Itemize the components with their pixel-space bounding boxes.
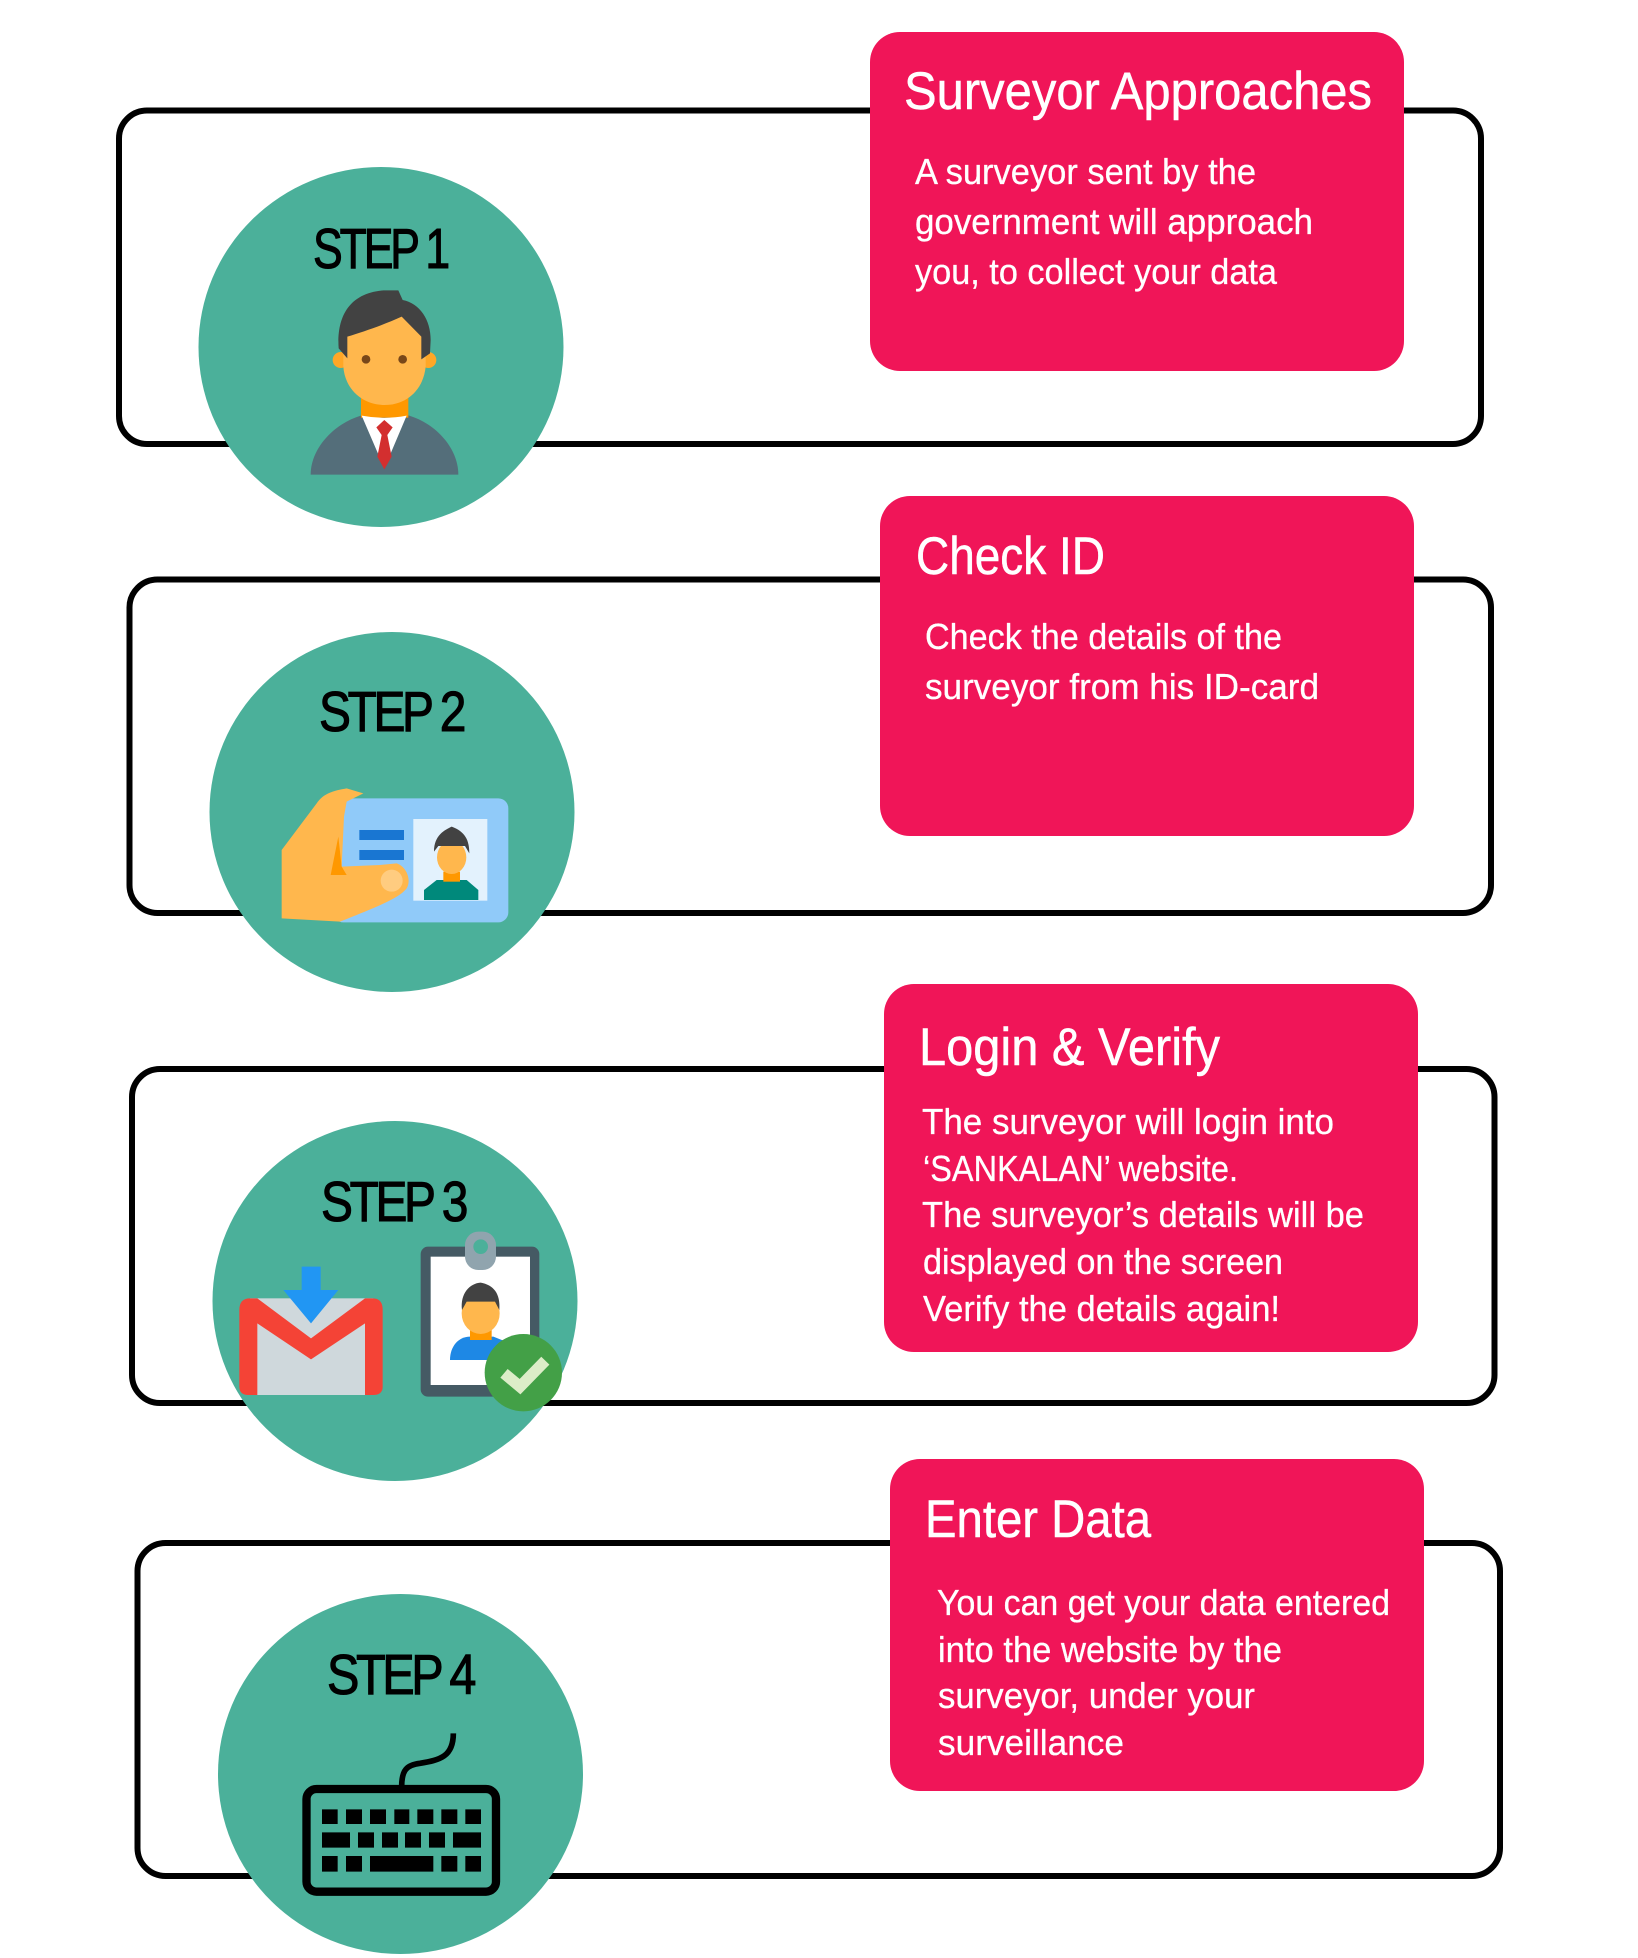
- card body text: The surveyor will login into: [922, 1101, 1334, 1142]
- card body text: surveyor from his ID-card: [925, 666, 1319, 707]
- card: Enter Data: [890, 1459, 1424, 1791]
- card heading: Surveyor Approaches: [904, 62, 1372, 121]
- card body text: into the website by the: [938, 1629, 1282, 1670]
- card body text: You can get your data entered: [937, 1582, 1390, 1623]
- panel: step 3: [132, 984, 1494, 1481]
- card body text: you, to collect your data: [915, 251, 1278, 292]
- panel: step 4: [138, 1459, 1500, 1954]
- card body text: [915, 151, 1313, 292]
- icon: keyboard: [306, 1733, 496, 1892]
- step label: STEP 3: STEP 3: [321, 1170, 467, 1234]
- outline frame: step 3: [132, 1069, 1494, 1403]
- card heading: Check ID: [916, 527, 1105, 586]
- outline frame: step 1: [119, 110, 1481, 444]
- card body text: ‘SANKALAN’ website.: [923, 1148, 1238, 1189]
- outline frame: step 4: [138, 1543, 1500, 1876]
- circle: step 4: [218, 1594, 583, 1954]
- card heading: Enter Data: [925, 1490, 1151, 1549]
- card body text: surveyor, under your: [938, 1675, 1255, 1716]
- circle: step 2: [210, 632, 574, 992]
- card body text: A surveyor sent by the: [915, 151, 1256, 192]
- card body text: surveillance: [938, 1722, 1124, 1763]
- card body text: [925, 616, 1319, 707]
- icon: surveyor man in suit: [311, 290, 458, 475]
- icon: Gmail envelope with download arrow: [239, 1267, 383, 1395]
- step label: STEP 2: STEP 2: [319, 680, 464, 744]
- icon: verified surveyor clipboard: [421, 1232, 562, 1411]
- panel: step 1: [119, 32, 1481, 527]
- card: Surveyor Approaches: [870, 32, 1404, 371]
- card body text: Check the details of the: [925, 616, 1282, 657]
- card body text: Verify the details again!: [923, 1288, 1280, 1329]
- card body text: [922, 1101, 1364, 1329]
- card: Login & Verify: [884, 984, 1418, 1352]
- card body text: displayed on the screen: [923, 1241, 1283, 1282]
- card body text: [937, 1582, 1390, 1763]
- card body text: government will approach: [915, 201, 1313, 242]
- card body text: The surveyor’s details will be: [922, 1194, 1364, 1235]
- icon: hand holding ID card: [282, 788, 508, 922]
- outline frame: step 2: [130, 580, 1491, 913]
- circle: step 3: [212, 1121, 578, 1481]
- step label: STEP 1: STEP 1: [313, 217, 448, 281]
- card heading: Login & Verify: [919, 1018, 1220, 1077]
- step label: STEP 4: STEP 4: [327, 1643, 476, 1707]
- card: Check ID: [880, 496, 1414, 836]
- circle: step 1: [198, 167, 564, 527]
- panel: step 2: [130, 496, 1491, 992]
